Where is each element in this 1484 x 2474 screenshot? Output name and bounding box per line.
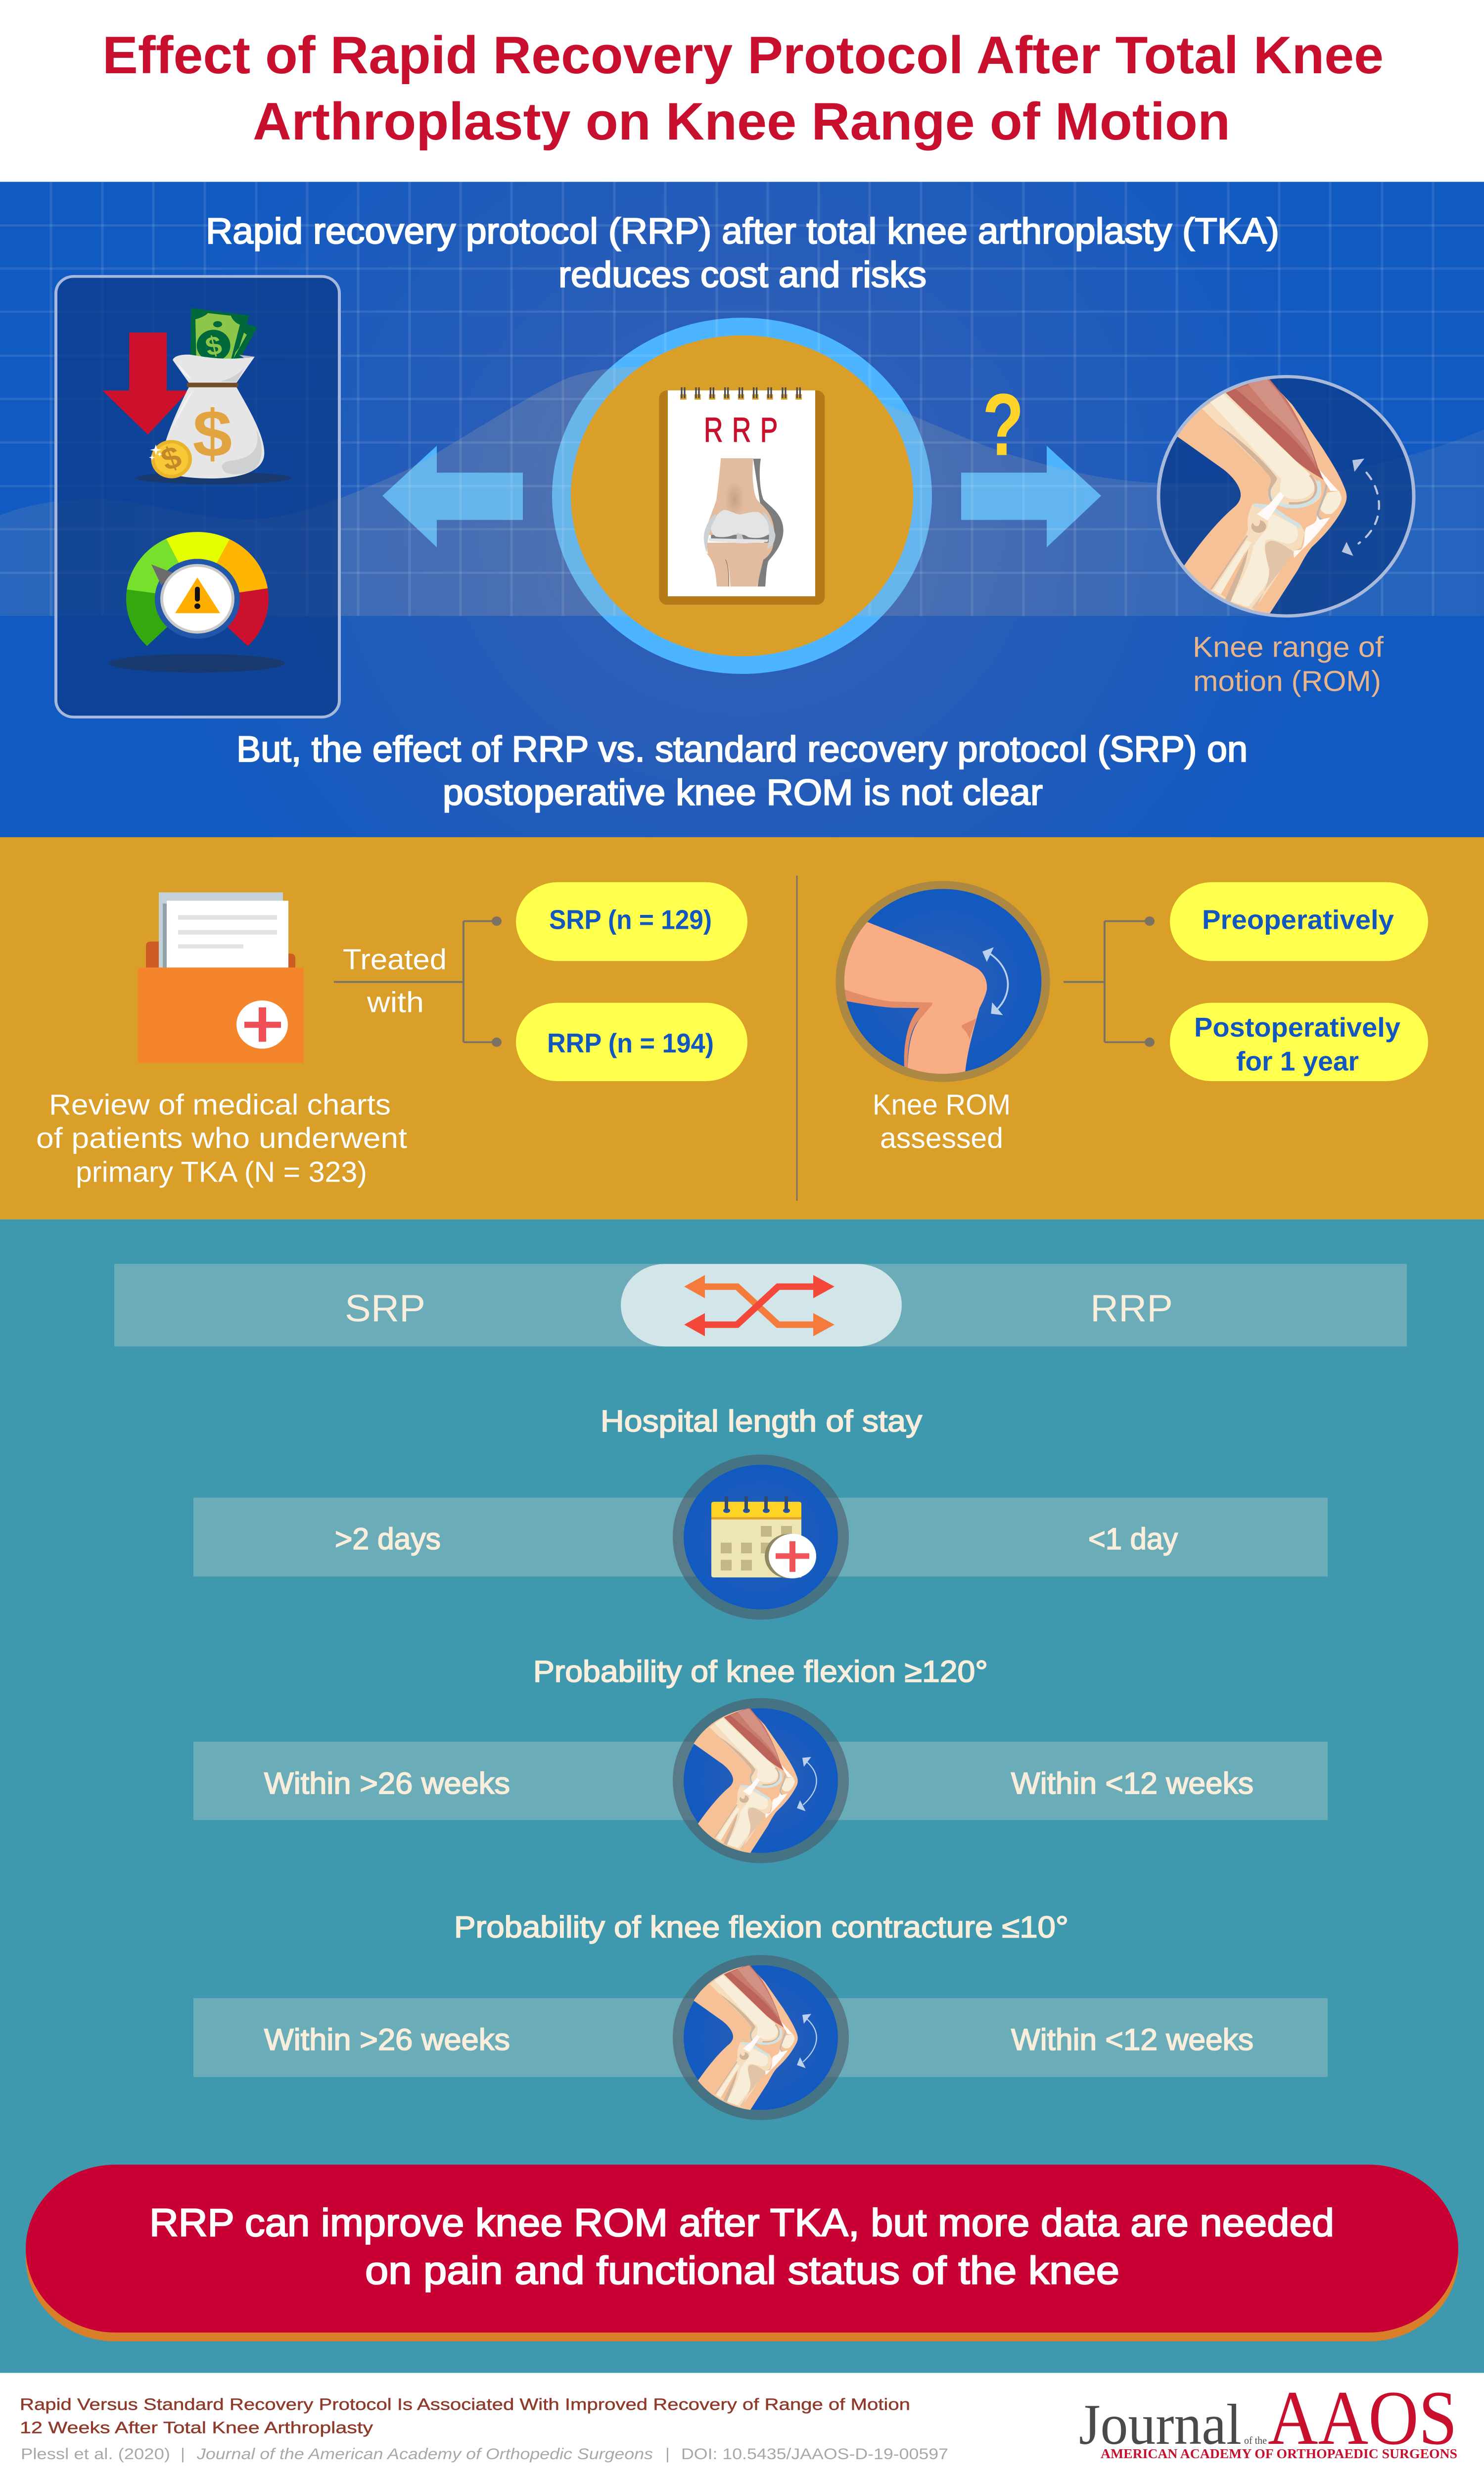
icon: down arrow: [102, 333, 189, 434]
comparison header bar: SRP: [345, 1287, 425, 1330]
heading: RRP reduces cost and risks: Rapid recovery protocol (RRP) after total knee arthroplasty (TKA): [206, 211, 1279, 252]
row: knee flexion contracture at most 10 degrees: Probability of knee flexion contracture ≤10°: [454, 1910, 1068, 1944]
text: knee ROM assessed: Knee ROM: [873, 1089, 1011, 1121]
icon: calendar: [711, 1496, 816, 1578]
heading: RRP reduces cost and risks: reduces cost and risks: [558, 255, 927, 295]
panel: study methods: [0, 837, 1484, 1219]
logo: Journal of the AAOS: [1079, 2376, 1457, 2462]
icon: money bag: $: [203, 330, 225, 362]
front view knee: [704, 458, 784, 586]
icon: knee ROM assessed: [835, 881, 1050, 1082]
row: hospital length of stay: >2 days: [335, 1522, 441, 1556]
icon: notepad with RRP and knee on gold disc: RRP: [704, 411, 778, 449]
panel: results: [0, 1219, 1484, 2373]
title: Effect of Rapid Recovery Protocol After Total Knee: [102, 26, 1384, 85]
row: knee flexion at least 120 degrees: [193, 1655, 1328, 1859]
pill: RRP: RRP (n = 194): [547, 1028, 714, 1058]
icon: crossing arrows: [684, 1275, 835, 1336]
footer: citation: [20, 2395, 948, 2463]
text: knee ROM assessed: assessed: [880, 1122, 1003, 1154]
text: chart review: primary TKA (N = 323): [76, 1156, 367, 1188]
callout: conclusion: on pain and functional status of the knee: [365, 2249, 1119, 2292]
text: treated with: with: [367, 986, 424, 1018]
arrow: right toward knee range of motion: [961, 446, 1101, 547]
icon: money bag: [135, 308, 292, 484]
text: treated with: [343, 944, 447, 1018]
footer: citation: Journal of the American Academy of Orthopedic Surgeons: [196, 2445, 653, 2463]
row: knee flexion at least 120 degrees: Probability of knee flexion ≥120°: [533, 1655, 988, 1688]
row: knee flexion contracture at most 10 degrees: [193, 1910, 1328, 2116]
title: [102, 26, 1384, 151]
icon: notepad with RRP and knee on gold disc: [571, 335, 913, 656]
row: hospital length of stay: <1 day: [1088, 1522, 1178, 1556]
footer: citation: Plessl et al. (2020): [21, 2445, 170, 2463]
heading: effect not clear: But, the effect of RRP vs. standard recovery protocol (SRP) on: [236, 729, 1248, 770]
panel: cost and risks: [56, 277, 339, 717]
heading: effect not clear: [236, 729, 1248, 813]
row: hospital length of stay: [193, 1405, 1328, 1615]
ring behind the central disc: [552, 318, 932, 674]
row: hospital length of stay: Hospital length of stay: [601, 1405, 923, 1438]
footer: citation: 12 Weeks After Total Knee Arthroplasty: [20, 2419, 373, 2437]
row: knee flexion contracture at most 10 degrees: Within <12 weeks: [1011, 2023, 1253, 2057]
row: knee flexion contracture at most 10 degrees: Within >26 weeks: [264, 2023, 510, 2057]
pill: postoperatively for 1 year: [1170, 1003, 1428, 1081]
icon: medical chart folder: [138, 893, 304, 1063]
title: Arthroplasty on Knee Range of Motion: [253, 92, 1230, 151]
logo: Journal of the AAOS: Journal: [1079, 2393, 1242, 2456]
pill: SRP: [516, 882, 747, 961]
pill: preoperatively: Preoperatively: [1202, 904, 1394, 935]
footer: citation: |: [181, 2445, 185, 2463]
icon: money bag: $: [192, 397, 232, 471]
text: chart review: [36, 1089, 407, 1188]
icon: question mark: ?: [982, 376, 1024, 474]
icon: knee anatomy: [689, 1705, 817, 1859]
footer: citation: Rapid Versus Standard Recovery Protocol Is Associated With Improved Recovery of Range of Motion: [20, 2395, 910, 2414]
text: knee ROM assessed: [873, 1089, 1011, 1154]
row: knee flexion at least 120 degrees: Within >26 weeks: [264, 1767, 510, 1800]
connector: treatment branches: [334, 916, 502, 1047]
icon: money bag: $: [156, 439, 186, 477]
pill: RRP: [516, 1003, 747, 1081]
pill: postoperatively for 1 year: Postoperatively: [1194, 1012, 1400, 1043]
logo: Journal of the AAOS: AMERICAN ACADEMY OF ORTHOPAEDIC SURGEONS: [1101, 2447, 1457, 2462]
icon: knee anatomy circle: [1159, 372, 1414, 625]
text: treated with: Treated: [343, 944, 447, 976]
heading: RRP reduces cost and risks: [206, 211, 1279, 295]
panel: background blue band: [0, 182, 1484, 837]
footer: citation: DOI: 10.5435/JAAOS-D-19-00597: [681, 2445, 948, 2463]
pill: SRP: SRP (n = 129): [549, 904, 712, 935]
logo: Journal of the AAOS: of the: [1244, 2435, 1267, 2446]
connector: assessment branches: [1064, 916, 1155, 1047]
icon: knee anatomy: [689, 1961, 817, 2116]
comparison header bar: [114, 1264, 1407, 1346]
label: knee range of motion: Knee range of: [1193, 631, 1384, 663]
callout: conclusion: [26, 2165, 1458, 2341]
label: knee range of motion: [1193, 631, 1384, 697]
pill: postoperatively for 1 year: for 1 year: [1236, 1046, 1359, 1076]
text: chart review: of patients who underwent: [36, 1122, 407, 1154]
arrow: left toward cost and risks: [382, 446, 523, 547]
pill: preoperatively: [1170, 882, 1428, 961]
icon: risk gauge: [109, 545, 285, 672]
heading: effect not clear: postoperative knee ROM is not clear: [443, 773, 1043, 813]
label: knee range of motion: motion (ROM): [1193, 665, 1381, 697]
row: knee flexion at least 120 degrees: Within <12 weeks: [1011, 1767, 1253, 1800]
callout: conclusion: RRP can improve knee ROM after TKA, but more data are needed: [149, 2201, 1334, 2245]
comparison header bar: RRP: [1090, 1287, 1173, 1330]
footer: citation: |: [665, 2445, 670, 2463]
text: chart review: Review of medical charts: [49, 1089, 391, 1121]
